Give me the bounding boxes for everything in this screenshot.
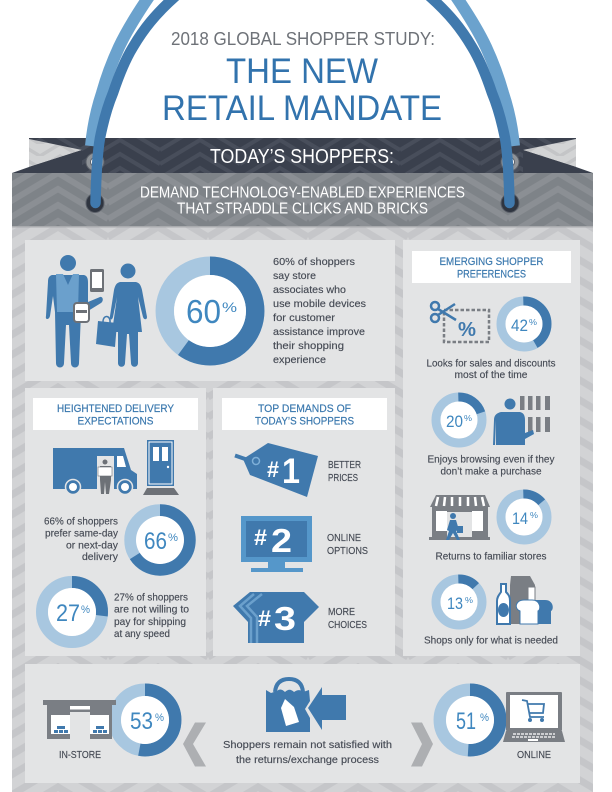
caption: not satisfied	[223, 739, 392, 766]
text: 66% of shoppers: or next-day	[66, 540, 119, 552]
icon: #2 monitor	[241, 516, 312, 572]
panel: top demands	[213, 388, 395, 656]
label: better prices	[328, 459, 361, 484]
arrow: right chevron	[411, 722, 433, 766]
label: online: ONLINE	[517, 749, 551, 761]
text: 60% of shoppers	[273, 256, 366, 366]
title: 2018 GLOBAL SHOPPER STUDY:	[171, 28, 435, 49]
label: online options: OPTIONS	[327, 545, 368, 557]
icon: #3 shirt: 3	[274, 600, 296, 637]
donut: 20%: %	[464, 414, 472, 423]
text: 60% of shoppers: say store	[273, 270, 316, 282]
donut: 27%	[42, 582, 102, 642]
icon: store front	[429, 495, 490, 540]
panel: returns satisfaction	[25, 664, 580, 783]
panel: emerging shopper preferences	[403, 240, 580, 656]
subtitle: today's shoppers: TODAY’S SHOPPERS:	[210, 146, 394, 168]
caption: familiar stores: Returns to familiar stores	[436, 550, 546, 562]
text: 66% of shoppers: delivery	[82, 551, 119, 563]
text: 60% of shoppers: for customer	[273, 312, 336, 324]
donut: 20%	[436, 397, 482, 443]
donut: 60%	[165, 266, 255, 356]
label: in-store: IN-STORE	[59, 749, 101, 761]
donut: 51%: %	[480, 712, 489, 724]
title: RETAIL MANDATE	[162, 89, 442, 128]
caption: sales and discounts	[426, 358, 556, 381]
subtitle: today's shoppers	[140, 146, 465, 218]
handle fronts	[96, 0, 510, 203]
subtitle: today's shoppers: DEMAND TECHNOLOGY-ENABLED EXPERIENCES	[140, 184, 465, 202]
caption: sales and discounts: most of the time	[454, 369, 528, 381]
donut: 42%	[501, 301, 547, 347]
caption: sales and discounts: Looks for sales and discounts	[426, 358, 556, 370]
caption: what is needed: Shops only for what is needed	[424, 634, 558, 646]
donut: 13%: %	[465, 596, 473, 605]
label: better prices: BETTER	[328, 459, 361, 471]
icon: #1 price tag	[235, 443, 318, 497]
bag back flap	[12, 138, 593, 173]
heading: emerging	[412, 251, 571, 283]
donut: 60%: %	[222, 299, 237, 315]
text: 66% of shoppers: 66% of shoppers	[44, 516, 118, 528]
text: 60% of shoppers: 60% of shoppers	[273, 256, 355, 268]
icon: returned shopping bag	[266, 679, 310, 732]
text: 60% of shoppers: experience	[273, 354, 326, 366]
label: better prices: PRICES	[328, 472, 358, 484]
title	[162, 28, 442, 128]
heading: top demands: TODAY’S SHOPPERS	[255, 416, 354, 428]
icon: #1 price tag: #	[267, 457, 279, 482]
caption: not satisfied: Shoppers remain not satisfied with	[223, 739, 392, 751]
subtitle: today's shoppers: THAT STRADDLE CLICKS AND BRICKS	[177, 200, 428, 218]
label: online options	[327, 532, 368, 557]
donut: 14%: 14	[512, 509, 528, 528]
bag front and background	[12, 173, 593, 792]
donut: 53%: %	[155, 712, 164, 724]
heading: top demands	[222, 398, 387, 430]
text: 60% of shoppers: use mobile devices	[273, 298, 366, 310]
icon: door	[143, 440, 179, 495]
donut: 66%: %	[168, 532, 178, 544]
icon: groceries	[497, 576, 553, 624]
heading: emerging: PREFERENCES	[457, 268, 526, 280]
text: 60% of shoppers: assistance improve	[273, 326, 365, 338]
label: more choices: MORE	[328, 606, 355, 618]
heading: emerging: EMERGING SHOPPER	[440, 256, 544, 268]
text: 27% of shoppers: at any speed	[114, 628, 170, 640]
icon: #3 shirt: #	[258, 606, 271, 631]
icon: #2 monitor: #	[254, 525, 267, 550]
bag handles	[91, 0, 514, 146]
caption: browsing: don’t make a purchase	[440, 466, 542, 478]
title: THE NEW	[226, 52, 378, 91]
icon: delivery truck	[53, 448, 137, 494]
donut: 66%	[130, 510, 190, 570]
heading: delivery: HEIGHTENED DELIVERY	[57, 403, 175, 415]
label: more choices: CHOICES	[328, 619, 367, 631]
donut: 42%: 42	[511, 316, 528, 335]
donut: 13%: 13	[447, 594, 463, 613]
arrow: left chevron	[183, 722, 206, 766]
donut: 66%: 66	[144, 528, 167, 555]
panel: store associates	[25, 240, 395, 381]
text: 60% of shoppers: their shopping	[273, 340, 344, 352]
heading: delivery: EXPECTATIONS	[78, 416, 154, 428]
text: 27% of shoppers: are not willing to	[114, 604, 189, 616]
caption: browsing: Enjoys browsing even if they	[428, 454, 555, 466]
arrow: return arrow	[308, 687, 346, 730]
heading: top demands: TOP DEMANDS OF	[258, 403, 351, 415]
donut: 27%: 27	[56, 600, 80, 627]
icon: #1 price tag: 1	[282, 452, 300, 491]
donut: 14%: %	[530, 511, 538, 520]
donut: 53%: 53	[130, 708, 153, 735]
caption: not satisfied: the returns/exchange process	[236, 754, 379, 766]
caption: browsing	[428, 454, 555, 478]
text: 60% of shoppers: associates who	[273, 284, 346, 296]
icon: coupon scissors	[431, 302, 489, 342]
donut: 20%: 20	[446, 412, 463, 431]
icon: warehouse store	[43, 700, 116, 739]
icon: #3 shirt	[233, 592, 319, 643]
icon: coupon scissors: %	[458, 319, 476, 341]
text: 27% of shoppers	[114, 592, 189, 640]
icon: laptop with cart	[503, 692, 565, 742]
text: 27% of shoppers: pay for shipping	[114, 616, 186, 628]
donut: 53%	[115, 690, 175, 750]
icon: browsing shopper	[493, 396, 550, 445]
donut: 60%: 60	[186, 293, 221, 330]
donut: 14%	[501, 494, 547, 540]
icon: associate with mobile device and shopper	[46, 255, 147, 368]
donut: 42%: %	[529, 318, 537, 327]
eyelets	[86, 153, 519, 212]
text: 66% of shoppers: prefer same-day	[45, 528, 119, 540]
text: 27% of shoppers: 27% of shoppers	[114, 592, 188, 604]
donut: 13%	[436, 579, 482, 625]
donut: 51%	[440, 690, 500, 750]
icon: #2 monitor: 2	[271, 522, 292, 559]
label: online options: ONLINE	[327, 532, 361, 544]
panel: heightened delivery	[25, 388, 206, 656]
label: more choices	[328, 606, 367, 631]
text: 66% of shoppers	[44, 516, 119, 563]
heading: delivery	[33, 398, 198, 430]
donut: 27%: %	[81, 604, 90, 616]
donut: 51%: 51	[456, 708, 476, 735]
